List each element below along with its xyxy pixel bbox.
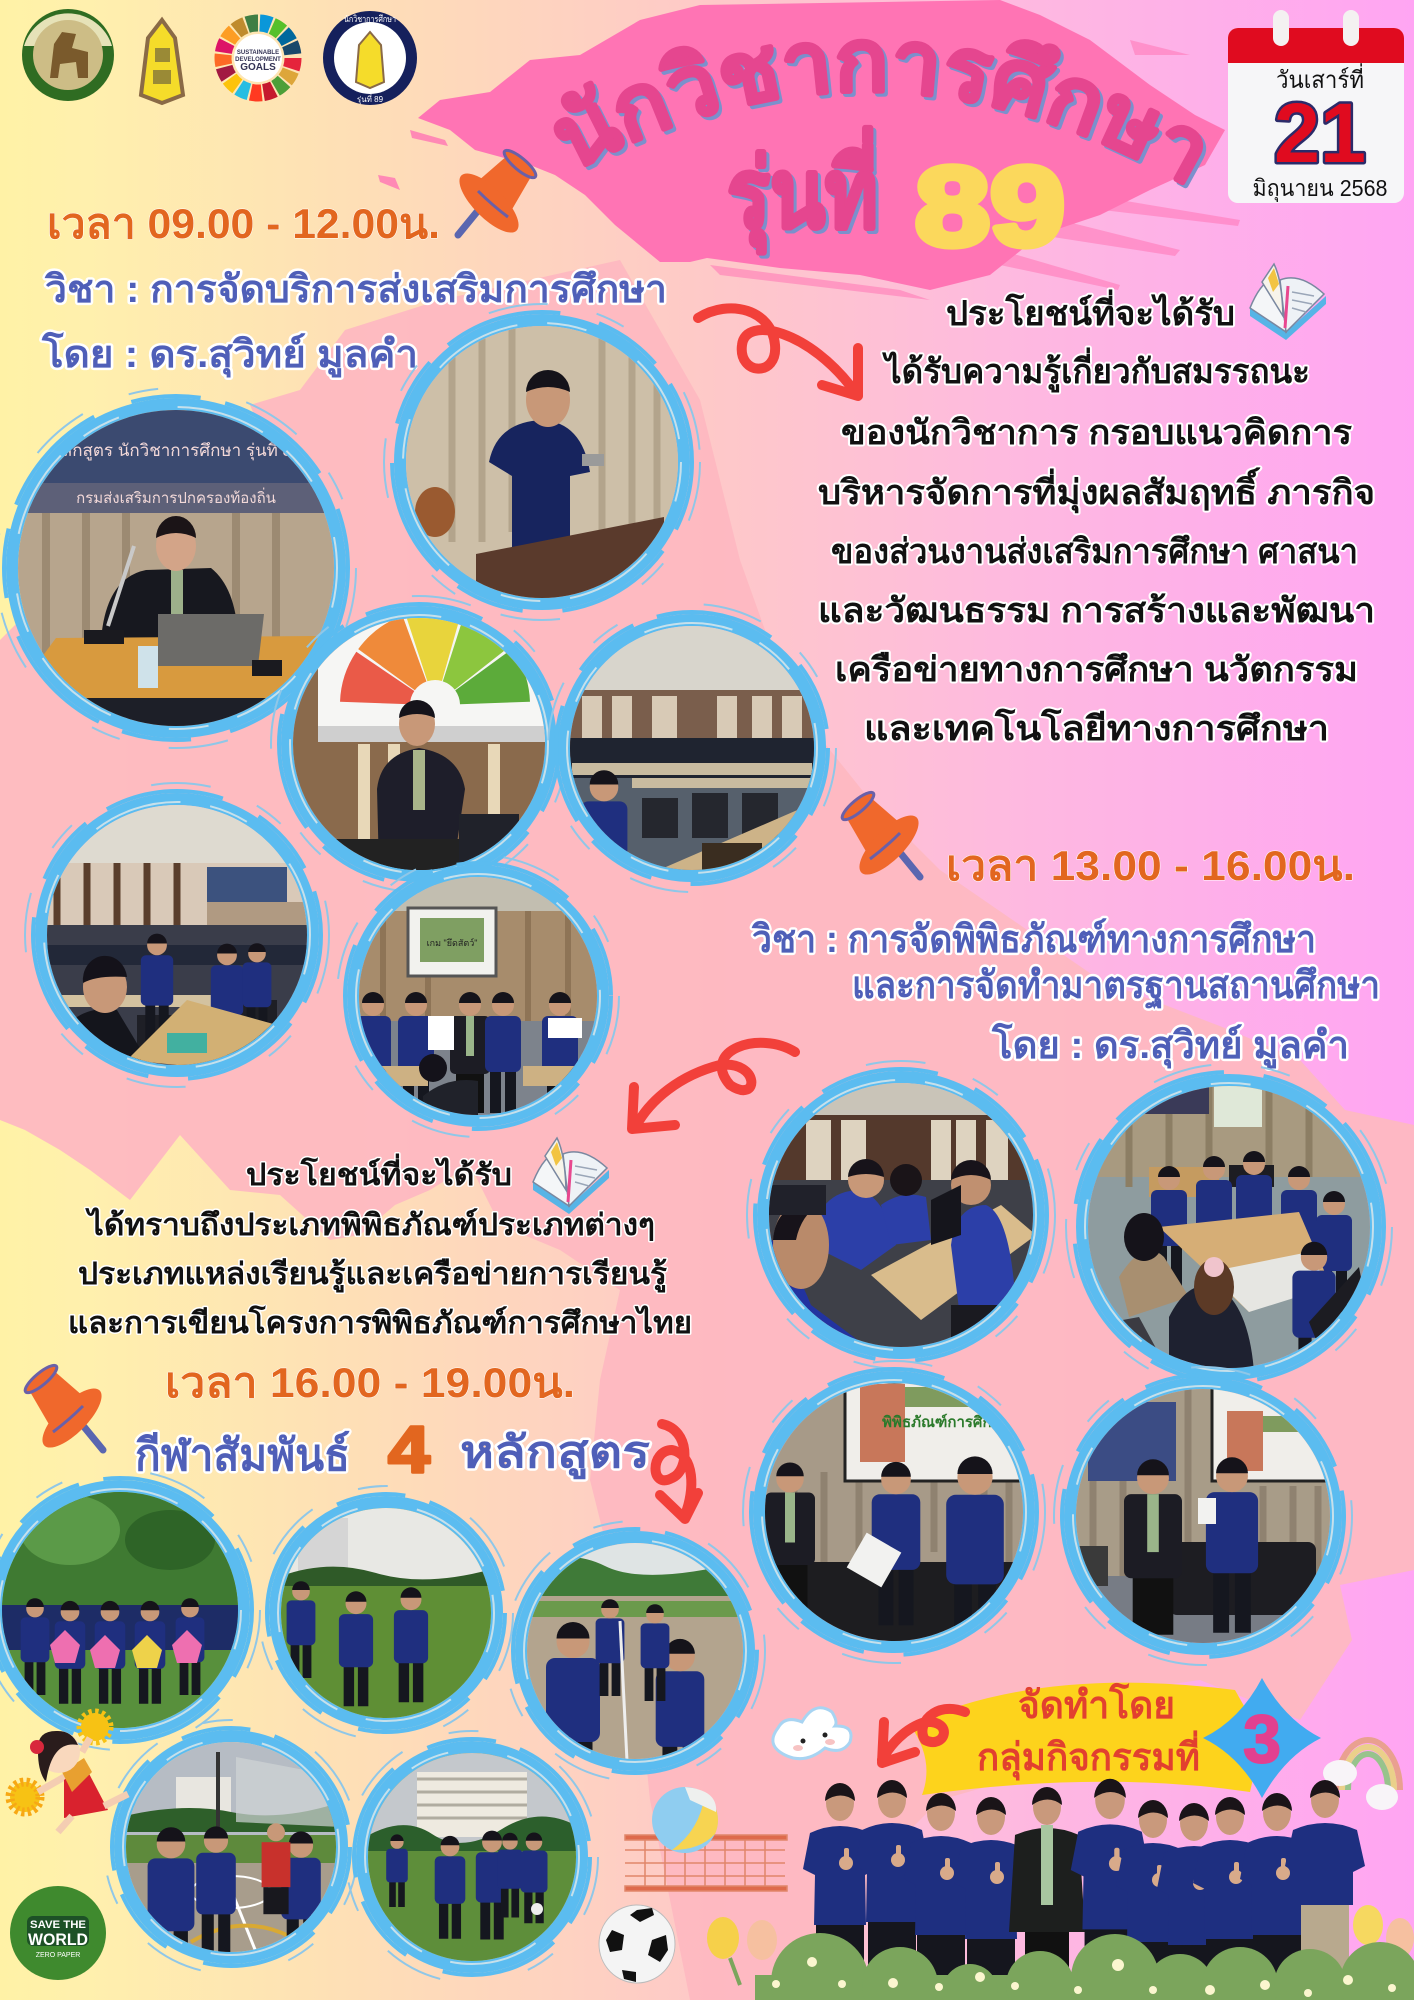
morning session text: วิชา : การจัดบริการส่งเสริมการศึกษา (44, 269, 667, 311)
icon: tulips (707, 1905, 1414, 1985)
photo: football match (346, 1731, 598, 1983)
logo: local administration seal (22, 9, 114, 101)
arrow: to benefits 2 (632, 1043, 795, 1129)
photo: three presenters: พิพิธภัณฑ์การศึกษา (882, 1413, 1010, 1431)
benefits 2: ประโยชน์ที่จะได้รับ (246, 1153, 512, 1192)
morning session text: เวลา 09.00 - 12.00น. (47, 200, 440, 247)
blue diamond with number (1203, 1678, 1321, 1798)
title line 2: รุ่นที่ (727, 126, 878, 254)
afternoon session text: และการจัดทำมาตรฐานสถานศึกษา (852, 965, 1380, 1010)
afternoon session text: โดย : ดร.สุวิทย์ มูลคำ (991, 1022, 1349, 1069)
benefits 1: บริหารจัดการที่มุ่งผลสัมฤทธิ์ ภารกิจ (818, 467, 1375, 514)
photo: speaker at laptop: กรมส่งเสริมการปกครองท้องถิ่น (76, 487, 276, 507)
banner: organised by group 3 (910, 1678, 1321, 1798)
logo: yellow shield (141, 20, 183, 103)
photo: net game (505, 1521, 765, 1804)
arrow: to benefits 1 (698, 308, 858, 396)
benefits 1: และวัฒนธรรม การสร้างและพัฒนา (818, 592, 1375, 630)
benefits 1: ของส่วนงานส่งเสริมการศึกษา ศาสนา (831, 533, 1358, 571)
badge: save the world: ZERO PAPER (36, 1952, 80, 1959)
evening session text: หลักสูตร (460, 1428, 650, 1479)
arrow: to sports photos (656, 1424, 698, 1519)
benefits 2: ได้ทราบถึงประเภทพิพิธภัณฑ์ประเภทต่างๆ (85, 1207, 655, 1242)
batch number: 89 (915, 144, 1065, 269)
badge: save the world: WORLD (28, 1930, 88, 1949)
logo: training class 89 badge (323, 11, 417, 105)
calendar (1228, 10, 1404, 203)
photo: table discussion right (1066, 1064, 1392, 1390)
benefits 2: ประเภทแหล่งเรียนรู้และเครือข่ายการเรียนรู้ (78, 1258, 667, 1293)
logo: sustainable development goals wheel: GOALS (240, 62, 276, 73)
evening session text (135, 1359, 650, 1486)
badge: save the world: SAVE THE (30, 1919, 86, 1931)
photo: two presenters with banner (1054, 1367, 1352, 1665)
evening session text: เวลา 16.00 - 19.00น. (165, 1359, 575, 1406)
day number: 21 (1274, 86, 1366, 180)
icon: rainbow (1323, 1740, 1400, 1810)
afternoon session text (751, 842, 1380, 1069)
logo: sustainable development goals wheel (209, 9, 307, 107)
photo: man with microphone at podium (384, 304, 700, 620)
morning session text (41, 200, 667, 378)
afternoon session text: เวลา 13.00 - 16.00น. (946, 842, 1355, 889)
icon: soccer ball (599, 1905, 675, 1983)
photo: group activity on stage (337, 855, 619, 1137)
benefits 1: เครือข่ายทางการศึกษา นวัตกรรม (835, 651, 1358, 689)
icon: volleyball (652, 1787, 718, 1853)
benefits 1: ประโยชน์ที่จะได้รับ (946, 289, 1235, 333)
afternoon session text: วิชา : การจัดพิพิธภัณฑ์ทางการศึกษา (751, 918, 1316, 961)
organiser text: จัดทำโดย (1018, 1682, 1175, 1727)
photo: speaker at laptop: หลักสูตร นักวิชาการศึกษา รุ่นที่ 89 (51, 438, 301, 461)
logos row (22, 9, 417, 107)
logo: sustainable development goals wheel: SUSTAINABLE (237, 50, 279, 56)
benefits 1: และเทคโนโลยีทางการศึกษา (864, 708, 1329, 748)
logo: training class 89 badge: นักวิชาการศึกษา (344, 14, 396, 24)
photo: speaker at laptop (0, 388, 356, 748)
photo: volleyball on sand (104, 1720, 358, 1984)
arrow: to team (882, 1709, 965, 1763)
photo: seminar room right (548, 604, 836, 928)
evening session text: กีฬาสัมพันธ์ (135, 1430, 350, 1480)
icon: smiling cloud (773, 1708, 851, 1759)
banner: organised by group 3: กลุ่มกิจกรรมที่ (977, 1730, 1200, 1781)
photo: seminar room left (25, 783, 329, 1087)
yellow ribbon (910, 1683, 1262, 1795)
banner: organised by group 3: 3 (1243, 1701, 1281, 1777)
benefits 1: ได้รับความรู้เกี่ยวกับสมรรถนะ (882, 347, 1310, 393)
photo: group activity on stage: เกม "ยึดสัตว์" (427, 937, 477, 948)
icon: pin afternoon (839, 789, 927, 883)
logo: training class 89 badge: รุ่นที่ 89 (357, 93, 384, 104)
icon: open book 2 (533, 1138, 609, 1214)
weekday: วันเสาร์ที่ (1276, 63, 1364, 94)
photo: two players with balloon (259, 1486, 513, 1740)
logo: sustainable development goals wheel: DEVELOPMENT (235, 57, 281, 63)
benefits 2 (68, 1153, 692, 1340)
evening session text: 4 (388, 1412, 430, 1486)
badge: save the world (10, 1886, 106, 1980)
character: cheerleader (10, 1713, 128, 1832)
month and year: มิถุนายน 2568 (1252, 175, 1388, 202)
team photo (803, 1779, 1365, 2000)
benefits 1: ของนักวิชาการ กรอบแนวคิดการ (841, 414, 1353, 452)
icon: volleyball net (625, 1835, 787, 1891)
bush with flowers (755, 1933, 1414, 2000)
morning session text: โดย : ดร.สุวิทย์ มูลคำ (41, 331, 418, 378)
title line 1 on arc: นักวิชาการศึกษา (554, 38, 1206, 188)
benefits 2: และการเขียนโครงการพิพิธภัณฑ์การศึกษาไทย (68, 1304, 692, 1340)
photo: table discussion left (747, 1061, 1055, 1369)
photo: cheerleaders on field (0, 1470, 260, 1750)
icon: pin evening (22, 1362, 110, 1456)
photo: three presenters (743, 1361, 1045, 1663)
pink brush strokes behind the title (378, 0, 1240, 300)
benefits 1 (818, 289, 1375, 748)
photo: presenter with gauge on screen (271, 596, 567, 892)
icon: open book 1 (1250, 264, 1326, 340)
title (554, 38, 1206, 269)
icon: pin morning (451, 147, 539, 241)
